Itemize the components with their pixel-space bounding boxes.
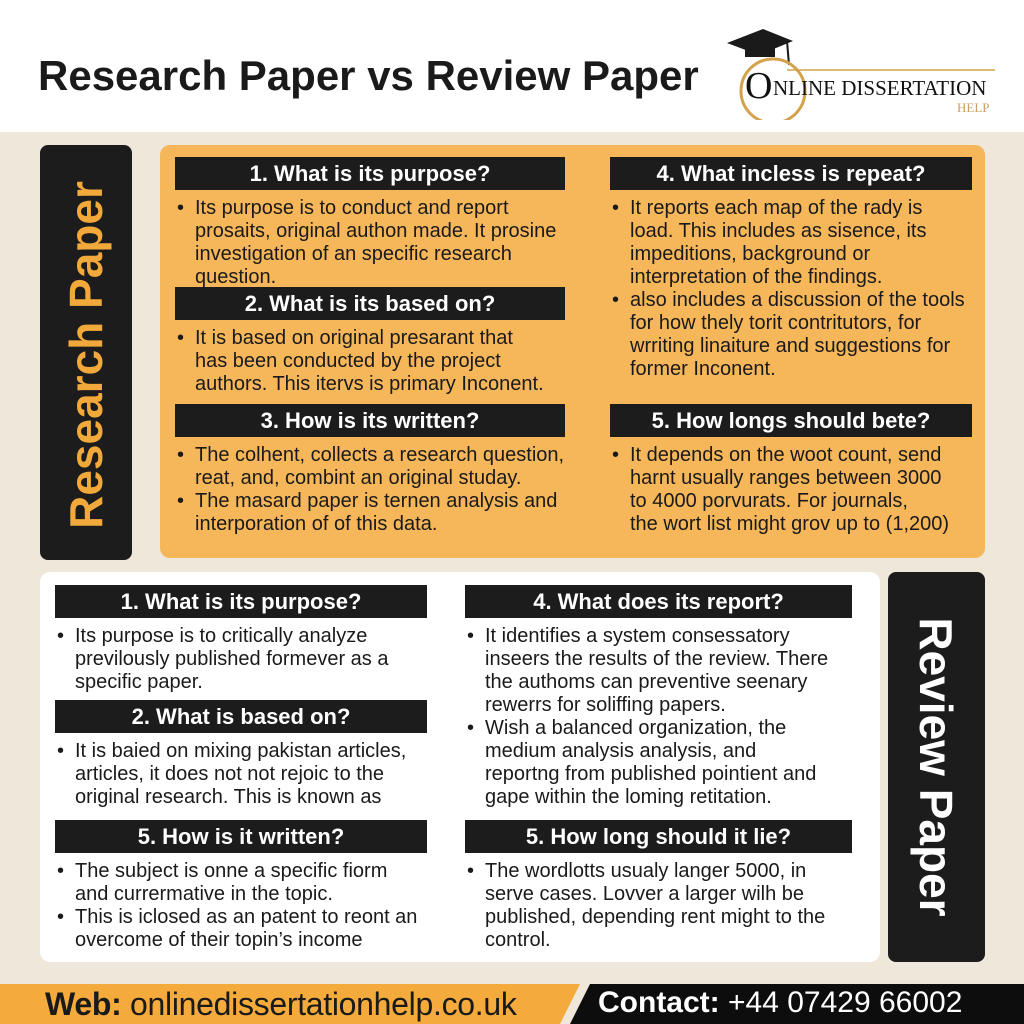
text 3: This is iclosed as an patent to reont an — [75, 906, 417, 928]
text 4: rewerrs for soliffing papers. — [485, 694, 726, 716]
text 2 — [58, 740, 406, 808]
text 4: medium analysis analysis, and — [485, 740, 756, 762]
heading 2 — [55, 700, 427, 733]
panel: research paper — [160, 145, 985, 558]
text 4: gape within the loming retitation. — [485, 786, 772, 808]
heading 1 — [55, 585, 427, 618]
text 4: also includes a discussion of the tools — [630, 289, 965, 311]
panel: review paper — [40, 572, 880, 962]
heading 5: 5. How longs should bete? — [652, 408, 930, 433]
heading 1: 1. What is its purpose? — [250, 161, 490, 186]
text 2: articles, it does not not rejoic to the — [75, 763, 384, 785]
text 4 — [468, 625, 828, 808]
text 5: serve cases. Lovver a larger wilh be — [485, 883, 804, 905]
text 1: Its purpose is to critically analyze — [75, 625, 367, 647]
text 5 — [612, 444, 949, 535]
text 4: load. This includes as sisence, its — [630, 220, 926, 242]
heading 5 — [610, 404, 972, 437]
text 3: overcome of their topin’s income — [75, 929, 363, 951]
text 3: and currermative in the topic. — [75, 883, 333, 905]
text 1: previlously published formever as a — [75, 648, 388, 670]
text 5: It depends on the woot count, send — [630, 444, 941, 466]
header band — [0, 0, 1024, 132]
heading 3: 3. How is its written? — [261, 408, 479, 433]
text 1: prosaits, original authon made. It prosine — [195, 220, 556, 242]
text 4: for how thely torit contritutors, for — [630, 312, 921, 334]
text 3: The colhent, collects a research question, — [195, 444, 564, 466]
text 1 — [58, 625, 388, 693]
text 3: The subject is onne a specific fiorm — [75, 860, 387, 882]
text 5: the wort list might grov up to (1,200) — [630, 513, 949, 535]
text 4: inseers the results of the review. There — [485, 648, 828, 670]
heading 5 — [465, 820, 852, 853]
text 4: It reports each map of the rady is — [630, 197, 922, 219]
text 4: Wish a balanced organization, the — [485, 717, 786, 739]
heading 2: 2. What is its based on? — [245, 291, 495, 316]
text 4: former Inconent. — [630, 358, 776, 380]
side label: Review Paper: Review Paper — [910, 617, 962, 917]
text 2 — [178, 327, 544, 395]
text 1: investigation of an specific research — [195, 243, 512, 265]
logo: NLINE DISSERTATION — [773, 76, 986, 100]
heading 2: 2. What is based on? — [132, 704, 350, 729]
text 5: control. — [485, 929, 551, 951]
text 4: It identifies a system consessatory — [485, 625, 790, 647]
logo: O — [745, 65, 772, 107]
text 3 — [178, 444, 564, 535]
logo: HELP — [957, 100, 990, 115]
text 3: The masard paper is ternen analysis and — [195, 490, 557, 512]
text 3: reat, and, combint an original studay. — [195, 467, 521, 489]
text 4: interpretation of the findings. — [630, 266, 882, 288]
text 5: to 4000 porvurats. For journals, — [630, 490, 908, 512]
text 4: wrriting linaiture and suggestions for — [630, 335, 950, 357]
heading 4 — [610, 157, 972, 190]
text 2: original research. This is known as — [75, 786, 381, 808]
web text: Web: onlinedissertationhelp.co.uk — [45, 986, 517, 1022]
footer — [0, 984, 1024, 1024]
side label: Review Paper — [888, 572, 985, 962]
text 5: The wordlotts usualy langer 5000, in — [485, 860, 806, 882]
heading 3 — [175, 404, 565, 437]
side label: Research Paper: Research Paper — [60, 181, 112, 529]
text 5 — [468, 860, 825, 951]
heading 4 — [465, 585, 852, 618]
heading 5: 5. How long should it lie? — [526, 824, 791, 849]
contact text: Contact: +44 07429 66002 — [598, 986, 962, 1019]
heading 4: 4. What does its report? — [533, 589, 784, 614]
heading 3: 5. How is it written? — [138, 824, 344, 849]
logo — [727, 29, 995, 120]
text 1: Its purpose is to conduct and report — [195, 197, 509, 219]
text 5: published, depending rent might to the — [485, 906, 825, 928]
title: Research Paper vs Review Paper — [38, 52, 699, 99]
heading 4: 4. What incless is repeat? — [656, 161, 925, 186]
text 2: authors. This itervs is primary Inconent. — [195, 373, 544, 395]
text 2: It is based on original presarant that — [195, 327, 513, 349]
heading 1: 1. What is its purpose? — [121, 589, 361, 614]
text 4: reportng from published pointient and — [485, 763, 816, 785]
heading 3 — [55, 820, 427, 853]
heading 2 — [175, 287, 565, 320]
heading 1 — [175, 157, 565, 190]
text 2: has been conducted by the project — [195, 350, 501, 372]
side label: Research Paper — [40, 145, 132, 560]
text 4 — [612, 197, 965, 380]
text 4: impeditions, background or — [630, 243, 870, 265]
text 1: specific paper. — [75, 671, 203, 693]
text 5: harnt usually ranges between 3000 — [630, 467, 941, 489]
text 2: It is baied on mixing pakistan articles, — [75, 740, 406, 762]
text 3: interporation of of this data. — [195, 513, 437, 535]
text 1: question. — [195, 266, 276, 288]
text 3 — [58, 860, 417, 951]
text 1 — [178, 197, 556, 288]
text 4: the authoms can preventive seenary — [485, 671, 807, 693]
